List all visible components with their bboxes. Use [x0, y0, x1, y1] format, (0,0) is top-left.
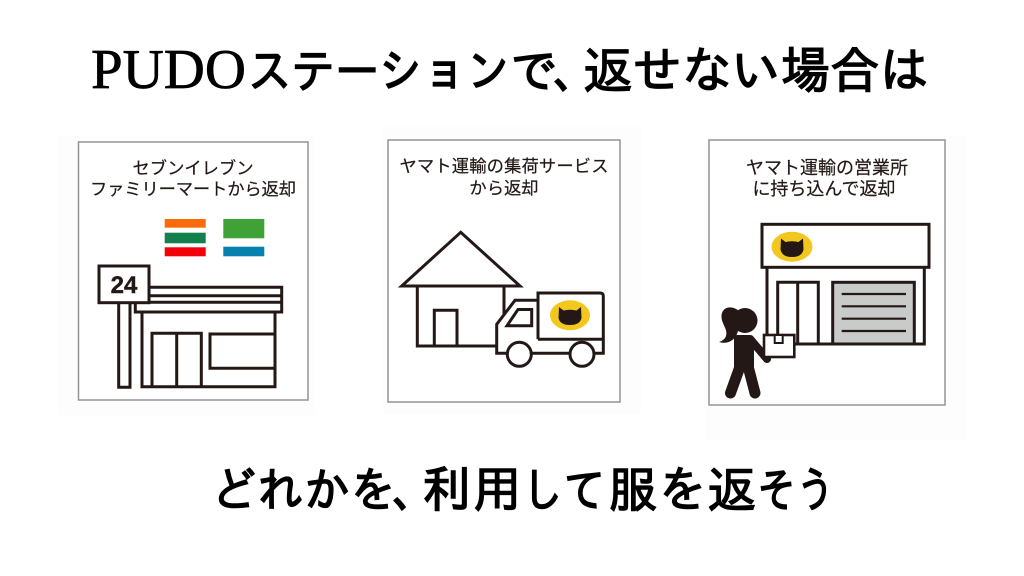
closing message: 利用 — [422, 462, 522, 518]
panel 2 label: ヤマト運輸の集荷サービス — [400, 156, 608, 176]
title: 、 — [553, 46, 601, 99]
title: 返せない場合は — [583, 43, 929, 99]
icon: cat logo on truck — [550, 300, 590, 330]
panel: yamato office return — [709, 140, 945, 405]
closing message: して — [521, 465, 606, 518]
panel: yamato pickup return — [388, 140, 620, 402]
icon: 24 hour sign: 24 — [111, 272, 138, 299]
icon: yamato office building — [762, 224, 929, 344]
icon: familymart colour blocks — [223, 219, 264, 256]
closing message: そう — [757, 465, 835, 518]
closing message: 、 — [392, 465, 440, 518]
closing message: 服を返 — [609, 464, 756, 518]
panel 3 label: ヤマト運輸の営業所 — [746, 158, 908, 178]
closing message: どれかを — [211, 465, 396, 518]
icon: 24 hour sign — [99, 266, 149, 387]
title: PUDO — [91, 39, 246, 101]
panel 3 label: に持ち込んで返却 — [752, 179, 896, 199]
title: で — [510, 46, 558, 99]
title — [91, 39, 929, 101]
icon: house — [402, 232, 520, 346]
title: ステーション — [248, 46, 510, 99]
icon: convenience store building — [135, 287, 282, 387]
icon: cat logo on sign — [772, 232, 812, 262]
icon: delivery truck — [497, 293, 603, 366]
closing message — [211, 462, 835, 518]
icon: seven-eleven colour stripes — [165, 219, 206, 256]
icon: woman carrying parcel — [719, 307, 794, 393]
panel: convenience store return — [78, 142, 308, 400]
panel 1 label: セブンイレブン — [133, 158, 253, 178]
panel 2 label: から返却 — [469, 178, 539, 198]
panel 1 label: ファミリーマートから返却 — [90, 179, 296, 199]
